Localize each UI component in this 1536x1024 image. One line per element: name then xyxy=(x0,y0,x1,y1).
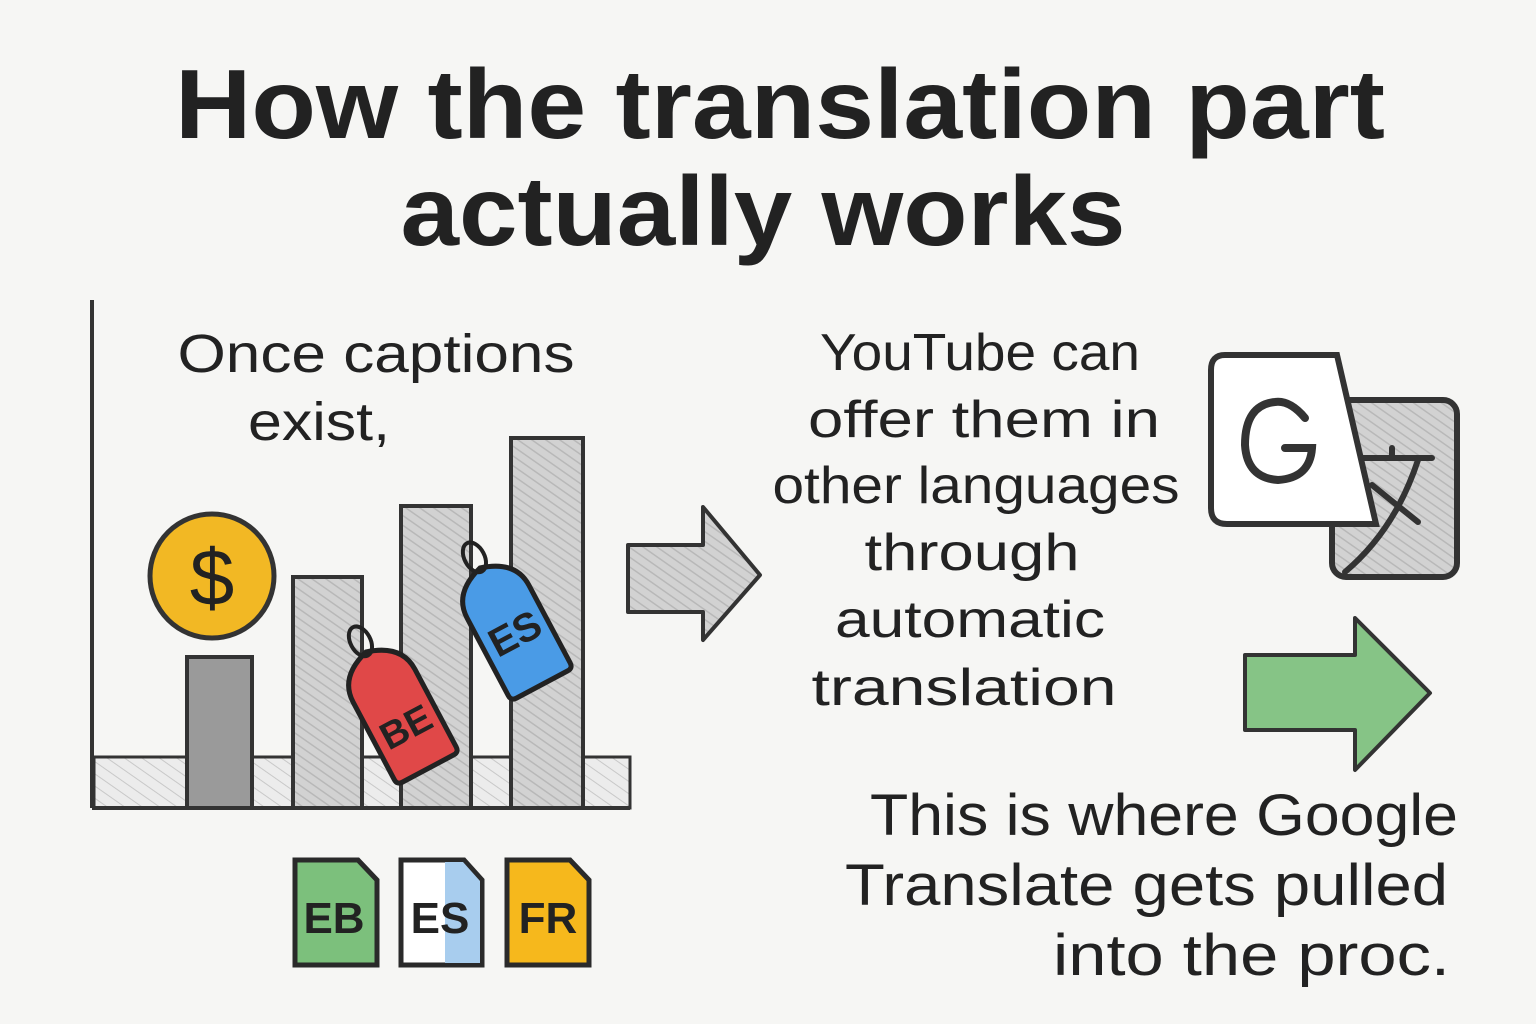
text: google translate pulled in: Translate gets pulled xyxy=(845,853,1448,918)
icon: dollar coin xyxy=(150,514,274,638)
text: YouTube can offer xyxy=(772,324,1180,717)
tag: BE xyxy=(322,611,459,785)
text: google translate pulled in xyxy=(845,783,1458,988)
icon: dollar coin: $ xyxy=(190,533,234,622)
text: google translate pulled in: into the proc. xyxy=(1053,923,1450,988)
file icons: language files: EB xyxy=(303,894,365,943)
text: once captions exist: exist, xyxy=(248,392,390,452)
text: YouTube can offer: automatic xyxy=(835,591,1105,649)
arrow: green xyxy=(1245,618,1430,770)
text: once captions exist xyxy=(178,324,574,452)
text: YouTube can offer: translation xyxy=(812,659,1116,717)
tag: ES xyxy=(436,527,573,701)
title xyxy=(175,49,1385,266)
arrow: gray xyxy=(628,507,760,640)
file icons: language files xyxy=(295,860,589,965)
tag: ES: ES xyxy=(481,602,549,666)
tag: BE: BE xyxy=(373,697,440,759)
title: How the translation part xyxy=(175,49,1385,159)
bar chart xyxy=(92,300,630,808)
text: once captions exist: Once captions xyxy=(178,324,574,384)
text: YouTube can offer: other languages xyxy=(772,457,1180,515)
text: YouTube can offer: offer them in xyxy=(808,391,1160,449)
text: YouTube can offer: YouTube can xyxy=(820,324,1140,382)
title: actually works xyxy=(400,156,1126,266)
text: google translate pulled in: This is where Google xyxy=(870,783,1458,848)
file icons: language files: FR xyxy=(519,894,577,943)
file icons: language files: ES xyxy=(411,894,469,943)
icon: google translate xyxy=(1211,355,1457,577)
text: YouTube can offer: through xyxy=(864,524,1080,582)
